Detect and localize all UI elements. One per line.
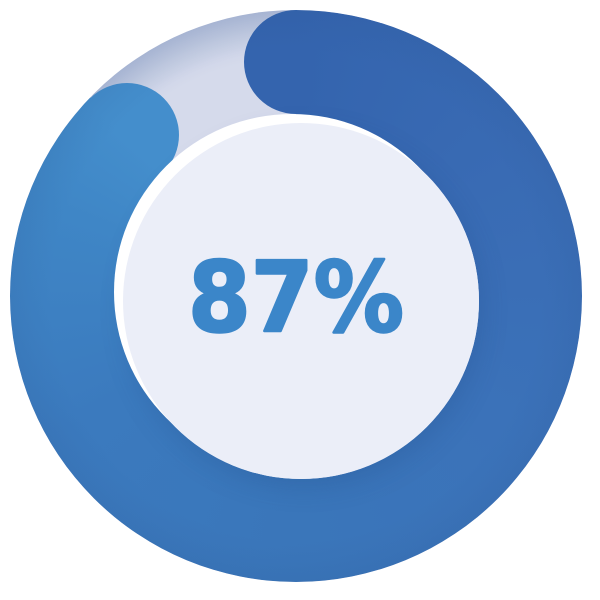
percentage value: 87% [188,241,404,354]
arc start cap [244,10,297,114]
inner disc [123,123,479,479]
disc shadow [123,123,479,479]
white inner rim [114,114,470,470]
arc end cap [75,83,179,187]
